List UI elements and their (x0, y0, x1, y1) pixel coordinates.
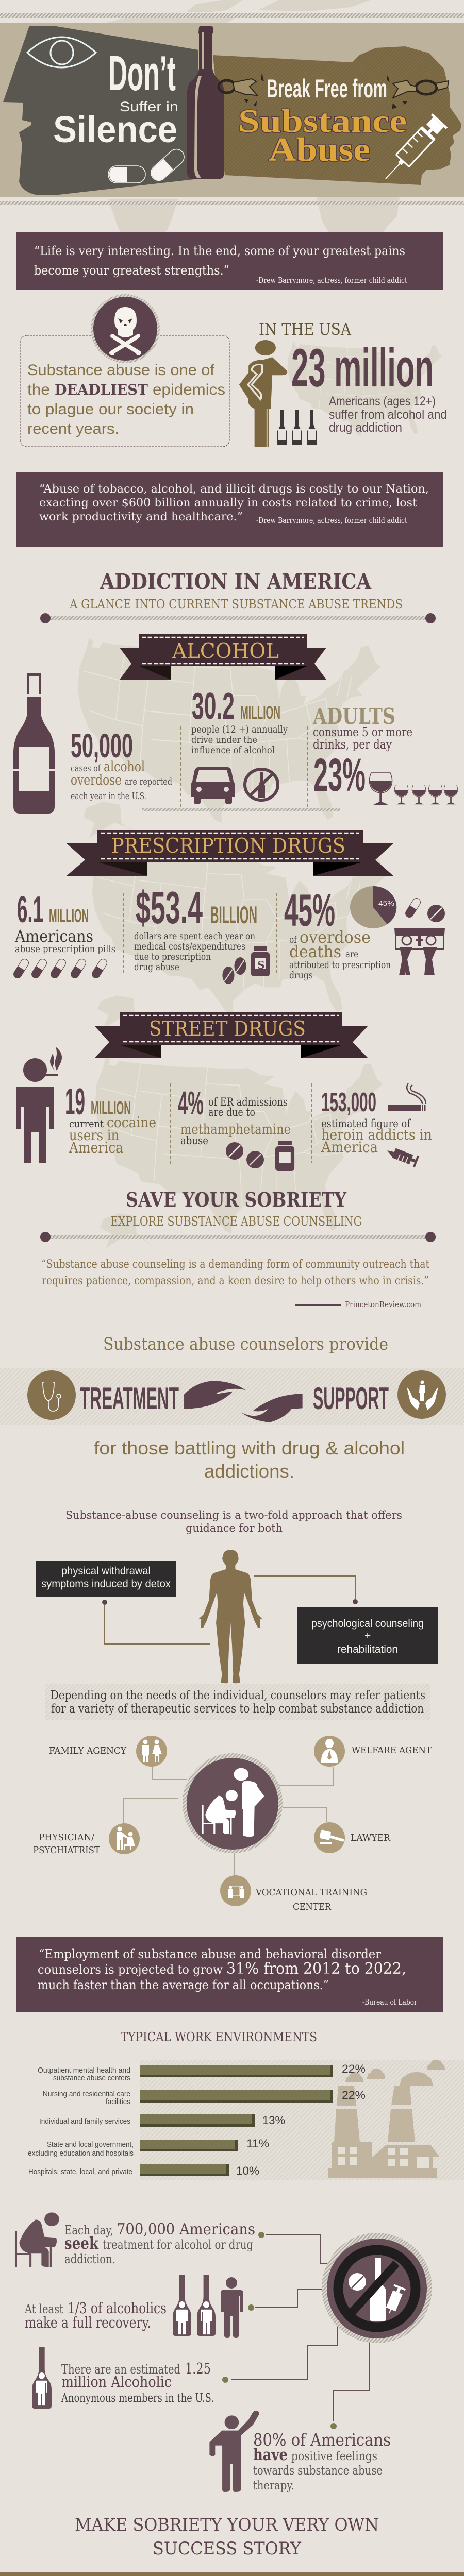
icon: bottles and person (173, 2275, 243, 2338)
stat: 4% ER admissions (178, 1084, 291, 1147)
fact: 1.25 million members: million Alcoholic (61, 2373, 172, 2391)
stat: 153,000: estimated figure of (321, 1117, 411, 1130)
stat: 50,000: 50,000 (71, 726, 133, 765)
service: physician / psychiatrist: PSYCHIATRIST (33, 1845, 100, 1856)
panel: prescription stats (12, 882, 445, 984)
service: welfare agent (314, 1736, 432, 1767)
stat: 4% ER admissions: of ER admissions (208, 1096, 288, 1108)
service: lawyer (314, 1822, 390, 1853)
fact: 80% positive feelings: towards substance abuse (253, 2464, 383, 2478)
bar: outpatient 22%: substance abuse centers (53, 2074, 130, 2082)
fact: 80% positive feelings: 80% of Americans (253, 2430, 391, 2450)
stat: 30.2 million: drive under the (191, 734, 257, 745)
bar: government 11% (28, 2137, 269, 2158)
icon: wine glasses (369, 773, 458, 805)
stat: 19 million: current (69, 1117, 104, 1130)
callout: psychological counseling: psychological counseling (311, 1618, 424, 1630)
heading: make sobriety your own success story: MAKE SOBRIETY YOUR VERY OWN (75, 2515, 379, 2535)
illustration: factory (328, 2060, 445, 2178)
fact: 1/3 of alcoholics (24, 2275, 254, 2338)
heading: save your sobriety: SAVE YOUR SOBRIETY (126, 1188, 347, 1211)
icon: bottle (187, 26, 224, 179)
fact: 700,000 seek treatment: addiction. (64, 2252, 115, 2266)
quote: Drew Barrymore (16, 232, 443, 290)
stat: 30.2 million (191, 686, 288, 756)
stat: 4% ER admissions: 4% (178, 1084, 204, 1122)
stat: 153,000: America (321, 1139, 378, 1156)
panel: deadliest epidemics (20, 294, 229, 447)
stat: 45% overdose deaths: attributed to prescription (289, 959, 391, 971)
icon: syringe (378, 113, 448, 186)
bar: hospitals 10%: Hospitals; state, local, and private (28, 2167, 132, 2176)
ribbon: prescription drugs (67, 830, 393, 876)
connector lines (231, 2235, 369, 2421)
service: vocational training center: VOCATIONAL TRAINING (255, 1887, 367, 1898)
stat: 45% overdose deaths (284, 885, 391, 981)
icon: car (191, 767, 235, 804)
stat: 19 million (65, 1081, 156, 1156)
fact: 700,000 seek treatment: Each day, (64, 2223, 113, 2238)
pie chart: 45%: 45% (378, 899, 394, 907)
stat: 19 million: America (69, 1139, 123, 1156)
callout: psychological counseling (297, 1607, 438, 1664)
stat: 6.1 million: 6.1 (17, 889, 43, 930)
bar: nursing 22%: facilities (106, 2097, 130, 2106)
service: vocational training center: CENTER (293, 1902, 331, 1912)
ribbon: alcohol (120, 634, 326, 680)
icon: eye (27, 37, 96, 67)
stat: $53.4 billion: due to prescription (134, 951, 211, 962)
stat: 50,000: cases of (71, 763, 101, 774)
stat: 153,000: 153,000 (321, 1088, 376, 1117)
header banner (0, 23, 464, 197)
icon: no drinking (245, 769, 278, 800)
footer banner (0, 2572, 464, 2576)
quote: Bureau of Labor: -Bureau of Labor (362, 1997, 418, 2007)
stat: $53.4 billion (134, 882, 257, 973)
service: family agency (49, 1736, 167, 1767)
icon: drinking person (239, 340, 287, 447)
text: counselors provide: Substance abuse counselors provide (103, 1334, 388, 1354)
ribbon: prescription drugs: PRESCRIPTION DRUGS (111, 835, 345, 858)
panel: alcohol stats (13, 673, 458, 814)
fact: 80% positive feelings (209, 2411, 391, 2493)
bar: hospitals 10%: 10% (236, 2164, 259, 2177)
heading: addiction in america: ADDICTION IN AMERICA (100, 569, 372, 594)
connector lines (123, 1767, 333, 1875)
text: two-fold approach: guidance for both (186, 1522, 283, 1534)
stat: 50,000: each year in the U.S. (71, 791, 146, 802)
pie chart: 45% (350, 886, 396, 928)
text block: to plague our society in (27, 401, 194, 418)
icon: person in hands (397, 1370, 446, 1419)
stat: 45% overdose deaths: deaths (289, 942, 341, 961)
band: treatment and support (0, 1368, 464, 1425)
bar: nursing 22%: 22% (342, 2089, 366, 2102)
heading: addiction in america (69, 569, 403, 612)
callout: physical withdrawal (36, 1561, 176, 1597)
title: substance abuse (238, 103, 407, 168)
panel: referral note (45, 1684, 430, 1720)
icon: small syringe (385, 1145, 419, 1167)
panel: recovery facts (16, 2212, 432, 2493)
bar: government 11%: 11% (246, 2137, 269, 2150)
stat: 30.2 million: people (12 +) annually (191, 724, 288, 735)
quote: Bureau of Labor: much faster than the average for all occupations.” (38, 1978, 329, 1992)
stat: 4% ER admissions: methamphetamine (180, 1122, 291, 1138)
bar: individual 13%: 13% (262, 2114, 285, 2127)
banner band (0, 23, 464, 197)
icon: central counselor (183, 1753, 283, 1853)
fact: 1/3 of alcoholics: make a full recovery. (25, 2314, 151, 2331)
bar: individual 13%: Individual and family services (39, 2117, 130, 2126)
quote: cost to the nation: exacting over $600 billion annually in costs related to crime, lost (39, 497, 417, 510)
bar: nursing 22%: Nursing and residential care (43, 2090, 130, 2098)
fact: 80% positive feelings: therapy. (253, 2479, 294, 2493)
top stripe (0, 13, 464, 18)
service: physician / psychiatrist (33, 1823, 140, 1856)
callout: psychological counseling: rehabilitation (337, 1643, 398, 1655)
stat: 50,000: are reported (125, 776, 172, 787)
title: don't suffer in silence: Silence (53, 109, 177, 150)
stat: 45% overdose deaths: overdose (300, 927, 371, 947)
label: support: SUPPORT (313, 1381, 389, 1416)
stat: 153,000 (321, 1088, 432, 1156)
text: two-fold approach: Substance-abuse counseling is a two-fold approach that offers (65, 1509, 402, 1521)
text block: epidemics (153, 381, 225, 398)
title: don't suffer in silence: Suffer in (120, 99, 178, 114)
heading: make sobriety your own success story (75, 2515, 379, 2559)
quote: Bureau of Labor: counselors is projected to grow (38, 1962, 223, 1977)
stat: 30.2 million: 30.2 (192, 686, 235, 727)
quote: Bureau of Labor: 31% from 2012 to 2022, (226, 1960, 406, 1978)
connector: left (102, 1600, 210, 1644)
right head silhouette (213, 46, 461, 185)
stat: 6.1 million: MILLION (49, 905, 89, 926)
service: lawyer: LAWYER (351, 1833, 390, 1843)
quote: cost to the nation: -Drew Barrymore, actress, former child addict (256, 516, 407, 525)
stat: $53.4 billion: medical costs/expenditures (134, 941, 245, 952)
fact: 1.25 million members: 1.25 (185, 2360, 211, 2377)
label: treatment: TREATMENT (80, 1381, 179, 1416)
text: two-fold approach (65, 1509, 402, 1534)
stat: 30.2 million: MILLION (240, 703, 280, 723)
fact: 700,000 seek treatment: treatment for alcohol or drug (103, 2238, 253, 2252)
fact: 1/3 of alcoholics: At least (24, 2302, 63, 2316)
quote: cost to the nation: work productivity and healthcare.” (39, 511, 243, 523)
quote: PrincetonReview (41, 1258, 429, 1309)
icon: cigarette (388, 1083, 426, 1111)
stat: 19 million: MILLION (91, 1097, 131, 1118)
fact: 1/3 of alcoholics: 1/3 of alcoholics (68, 2299, 167, 2317)
lower page background (0, 2566, 464, 2576)
quote: cost to the nation: “Abuse of tobacco, alcohol, and illicit drugs is costly to our Nation, (39, 483, 429, 496)
left head silhouette (3, 26, 198, 195)
stat: 45% overdose deaths: 45% (284, 885, 335, 936)
text: battling addictions (94, 1437, 405, 1482)
panel: two-fold diagram (36, 1550, 438, 1683)
bar: individual 13% (39, 2114, 285, 2127)
service: physician / psychiatrist: PHYSICIAN/ (39, 1832, 95, 1843)
stat: 4% ER admissions: are due to (208, 1106, 255, 1118)
fact: 700,000 seek treatment: seek (64, 2233, 99, 2253)
diagram: therapeutic services (33, 1736, 432, 1912)
stat: 19 million: 19 (65, 1081, 85, 1123)
stat: 6.1 million: abuse prescription pills (15, 943, 115, 955)
fact: 1.25 million members: Anonymous members in the U.S. (61, 2392, 214, 2405)
background world map, top (107, 0, 400, 242)
ribbon: alcohol: ALCOHOL (172, 640, 279, 663)
callout: psychological counseling: + (364, 1630, 371, 1642)
icon: large bottle (13, 673, 55, 814)
icon: pill bottle with pills: S (257, 959, 264, 971)
icon: human silhouette (198, 1550, 263, 1683)
icon: broken chains (219, 73, 449, 109)
stat: 19 million: cocaine (107, 1114, 156, 1131)
stat: 19 million: users in (69, 1127, 119, 1144)
heading: addiction in america: A GLANCE INTO CURRENT SUBSTANCE ABUSE TRENDS (69, 597, 403, 612)
title: substance abuse: Substance (238, 103, 407, 139)
stat: 45% overdose deaths: are (345, 948, 358, 960)
bar: government 11%: State and local government, (47, 2140, 134, 2149)
panel: street drug stats (16, 1047, 432, 1171)
dashed box (20, 335, 229, 447)
bar: hospitals 10% (28, 2164, 259, 2177)
map (288, 342, 442, 436)
stat: 45% overdose deaths: drugs (289, 970, 313, 981)
heading: typical work environments: TYPICAL WORK ENVIRONMENTS (121, 2030, 317, 2044)
stat: 45% overdose deaths: of (289, 934, 298, 945)
background maps (78, 638, 389, 1251)
stat: adults 23% (312, 704, 412, 801)
quote: Bureau of Labor (16, 1937, 443, 2012)
text: battling addictions: addictions. (204, 1461, 294, 1482)
icon: pills (108, 146, 187, 184)
text: battling addictions: for those battling with drug & alcohol (94, 1437, 405, 1459)
text block (27, 362, 225, 437)
stripe under header (0, 201, 464, 205)
text block: recent years. (27, 420, 119, 437)
stat: 30.2 million: influence of alcohol (191, 744, 275, 756)
stat: 4% ER admissions: abuse (180, 1134, 208, 1147)
stat caption: suffer from alcohol and (329, 408, 447, 422)
subtitle: break free from: Break Free from (267, 74, 387, 103)
quote: Drew Barrymore: -Drew Barrymore, actress, former child addict (256, 276, 407, 285)
stat: 153,000: heroin addicts in (321, 1126, 432, 1143)
text block: DEADLIEST (55, 381, 148, 398)
bar: government 11%: excluding education and hospitals (28, 2149, 134, 2158)
text block: the (27, 381, 50, 398)
stat: 50,000: overdose (71, 772, 122, 788)
heading: save your sobriety: EXPLORE SUBSTANCE ABUSE COUNSELING (110, 1214, 362, 1229)
fact: 80% positive feelings: have (253, 2446, 288, 2464)
bar: outpatient 22%: 22% (342, 2062, 366, 2075)
stat: 6.1 million: Americans (14, 926, 93, 946)
fact: 1.25 million members: There are an estimated (61, 2362, 180, 2377)
fact: 700,000 seek treatment (16, 2212, 264, 2267)
stat: $53.4 billion: $53.4 (136, 882, 203, 933)
panel: prescription stats: BILLION (210, 901, 257, 928)
stat: 50,000 (71, 726, 172, 802)
text block: Substance abuse is one of (27, 362, 215, 379)
icon: capsule and pill (404, 897, 445, 922)
heading: save your sobriety (110, 1188, 362, 1229)
callout: physical withdrawal: symptoms induced by detox (41, 1578, 171, 1590)
bar: nursing 22% (43, 2089, 366, 2106)
quote: Drew Barrymore: “Life is very interesting. In the end, some of your greatest pains (34, 244, 405, 258)
stat: 50,000: alcohol (104, 759, 145, 775)
quote: Drew Barrymore: become your greatest strengths.” (34, 263, 229, 278)
bar: outpatient 22% (38, 2062, 366, 2082)
icon: stethoscope (27, 1370, 76, 1420)
connector: right (254, 1576, 358, 1604)
icon: pills and bottle (226, 1141, 294, 1171)
heading: IN THE USA (259, 319, 352, 339)
stat: adults 23%: ADULTS (312, 704, 395, 729)
bar: outpatient 22%: Outpatient mental health and (38, 2066, 130, 2075)
stat: $53.4 billion: drug abuse (134, 961, 179, 973)
divider (40, 613, 436, 623)
title: substance abuse: Abuse (269, 131, 370, 168)
panel: in the USA (239, 319, 447, 447)
icon: reaching hands (184, 1381, 303, 1422)
stat: adults 23%: drinks, per day (313, 737, 392, 752)
icon: smoking person (16, 1047, 62, 1163)
service: vocational training center (220, 1875, 367, 1912)
ribbon: street drugs: STREET DRUGS (149, 1018, 306, 1041)
fact: 80% positive feelings: positive feelings (291, 2450, 377, 2463)
stat: adults 23%: 23% (313, 750, 366, 801)
service: family agency: FAMILY AGENCY (49, 1745, 127, 1756)
ribbon: street drugs (94, 1012, 368, 1058)
fact: 1.25 million members (32, 2347, 228, 2409)
icon: no substances badge (322, 2233, 432, 2343)
quote: Bureau of Labor: “Employment of substance abuse and behavioral disorder (39, 1947, 381, 1961)
quote: PrincetonReview: PrincetonReview.com (345, 1300, 421, 1309)
divider (40, 1232, 436, 1242)
quote: cost to the nation (16, 472, 443, 547)
stat caption: drug addiction (329, 420, 402, 435)
icon: pill bottle with pills (222, 946, 270, 984)
icon: seated people (394, 928, 445, 975)
chart: work environments (28, 2060, 464, 2180)
stat caption (329, 394, 447, 435)
stat: adults 23%: consume 5 or more (313, 725, 412, 739)
service: welfare agent: WELFARE AGENT (352, 1745, 432, 1756)
title: don't suffer in silence (53, 46, 178, 150)
icon: row of pills (12, 958, 108, 979)
heading: make sobriety your own success story: SUCCESS STORY (153, 2538, 302, 2559)
callout: physical withdrawal: physical withdrawal (61, 1565, 151, 1577)
icon: skull badge (91, 294, 160, 363)
title: don't suffer in silence: Don’t (108, 46, 176, 101)
stat caption: Americans (ages 12+) (329, 394, 436, 409)
stat: $53.4 billion: dollars are spent each year on (134, 930, 255, 942)
icon: three bottles (277, 410, 317, 445)
stat: 6.1 million (14, 889, 115, 955)
fact: 700,000 seek treatment: 700,000 Americans (117, 2221, 255, 2239)
